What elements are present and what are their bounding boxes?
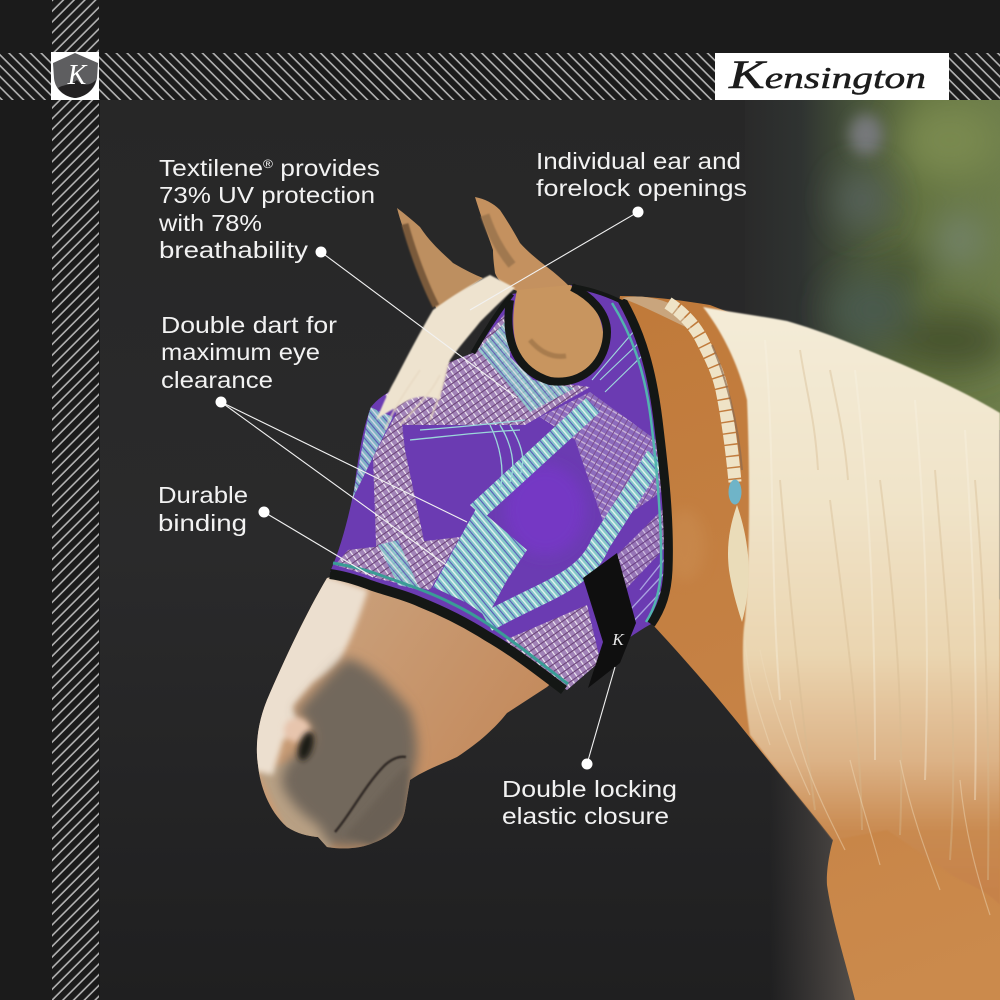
- right ear: [475, 197, 570, 300]
- lower right teal band: [487, 456, 656, 622]
- curved lines: [410, 420, 525, 490]
- upper plaid zone: [385, 305, 590, 425]
- pink nose: [284, 718, 310, 742]
- callout: ear openings: [536, 148, 747, 201]
- callout: Textilene: with 78%: [158, 210, 262, 236]
- central teal diagonal: [470, 398, 600, 518]
- horizontal striped band right end: [949, 53, 1000, 100]
- callout: Textilene: [158, 155, 380, 263]
- lower lip grey: [354, 770, 409, 846]
- lower teal piping: [333, 563, 568, 684]
- callout: Textilene: provides: [273, 155, 380, 181]
- callout: Textilene: 73% UV protection: [159, 182, 375, 208]
- line: ear openings: [470, 212, 638, 310]
- line: binding: [264, 512, 373, 577]
- braid: [622, 296, 749, 622]
- callout: durable binding: [158, 482, 248, 536]
- neck bump: [622, 296, 692, 330]
- central glow: [505, 465, 585, 555]
- callout: ear openings: Individual ear and: [536, 148, 741, 174]
- white blaze: [250, 574, 368, 775]
- left edge teal: [352, 407, 393, 500]
- callout: double dart: Double dart for: [161, 312, 337, 338]
- lower plum: [505, 605, 602, 695]
- lower mane wisps: [745, 640, 990, 915]
- callout: double dart: clearance: [161, 367, 273, 393]
- elastic closure strap: [583, 553, 636, 688]
- left ear: [397, 208, 483, 310]
- left ear inner: [405, 224, 436, 306]
- neck highlight: [665, 509, 705, 581]
- line: dart upper: [221, 402, 467, 522]
- icon: K shield logo: K: [67, 60, 88, 91]
- callout: elastic closure: elastic closure: [502, 803, 669, 829]
- callout: Textilene: Textilene: [159, 155, 252, 181]
- lower lip tan: [259, 766, 332, 848]
- callout: Textilene: ®: [263, 157, 273, 171]
- callout dots: [216, 206, 644, 770]
- braid tail: [728, 505, 749, 622]
- plum band: [540, 392, 664, 530]
- ear opening shadow: [530, 340, 566, 356]
- horizontal striped band: [0, 53, 715, 100]
- mane strands: [780, 350, 988, 880]
- callout: elastic closure: Double locking: [502, 776, 677, 802]
- callout: elastic closure: [502, 776, 677, 829]
- braid shadow: [712, 345, 742, 470]
- horse illustration: [250, 197, 1000, 1000]
- callout: durable binding: binding: [158, 510, 247, 536]
- callout: double dart: maximum eye: [161, 339, 320, 365]
- brand logo: Kensington: [715, 52, 949, 100]
- top right binding: [572, 286, 624, 303]
- lower left plaid: [335, 537, 460, 590]
- top left binding: [473, 294, 512, 353]
- fly mask: [320, 280, 680, 700]
- lower right purple lines: [632, 559, 664, 620]
- upper teal zone: [478, 320, 575, 412]
- left plum band: [373, 414, 424, 547]
- lower binding: [330, 574, 564, 690]
- horse head: [257, 560, 600, 848]
- ear opening binding: [508, 287, 607, 382]
- mouth line: [335, 757, 406, 832]
- icon: K shield logo: [51, 52, 99, 100]
- horse neck and body: [600, 296, 1000, 1000]
- callout: ear openings: forelock openings: [536, 175, 747, 201]
- callout: double dart: [161, 312, 337, 393]
- nostril: [295, 730, 317, 762]
- top right thin lines: [592, 332, 642, 392]
- callout lines: [221, 212, 638, 764]
- forelock: [376, 275, 515, 430]
- brand logo: Kensington: K ensington: [728, 52, 926, 97]
- mask mesh: [330, 285, 664, 690]
- plaid inside lower right: [618, 510, 664, 588]
- vertical striped band: [52, 0, 99, 1000]
- line: dart lower: [221, 402, 453, 570]
- line: closure: [587, 667, 615, 764]
- muzzle and face markings: [250, 574, 417, 850]
- strap tag logo: K: [611, 630, 625, 649]
- mane: [703, 307, 1000, 905]
- callout: durable binding: Durable: [158, 482, 248, 508]
- right binding: [622, 300, 668, 624]
- braid bead: [728, 480, 742, 504]
- mane highlights: [765, 340, 976, 800]
- ear opening fill: [513, 285, 603, 378]
- right teal piping: [612, 303, 661, 622]
- right ear inner: [485, 215, 512, 265]
- callout: Textilene: breathability: [159, 237, 308, 263]
- teal block: [433, 507, 527, 617]
- forelock wisps: [385, 365, 447, 430]
- line: Textilene: [321, 252, 517, 398]
- lower left teal stripe: [378, 540, 420, 590]
- grey muzzle: [282, 658, 417, 848]
